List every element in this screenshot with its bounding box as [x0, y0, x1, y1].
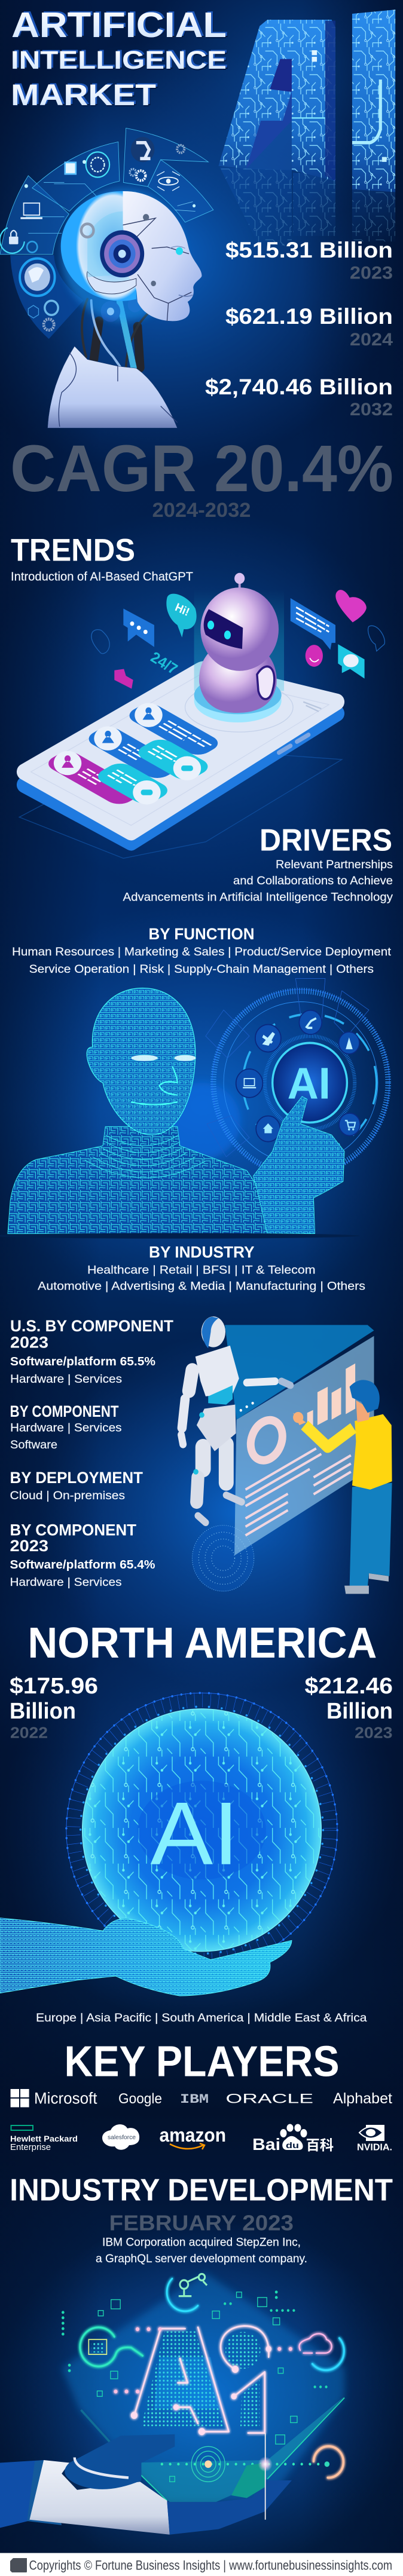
north america value 2022: 2022 — [10, 1723, 48, 1741]
target rings — [191, 2446, 329, 2482]
development date: FEBRUARY 2023 — [109, 2210, 294, 2235]
logo: Microsoft — [11, 2089, 97, 2108]
market value 2024 — [225, 304, 393, 350]
key players heading: KEY PLAYERS — [65, 2038, 340, 2086]
shoulder seams — [59, 353, 178, 427]
drivers heading: DRIVERS — [259, 823, 392, 858]
neck cables — [82, 297, 152, 367]
light cone — [62, 2273, 344, 2502]
illustration: wireframe human touching AI dial — [0, 978, 389, 1239]
dashboard screen — [225, 1325, 374, 1555]
drivers text — [123, 858, 393, 903]
title: ARTIFICIAL — [11, 5, 227, 45]
central glow — [163, 1083, 240, 1160]
person figure — [293, 1380, 392, 1594]
by component block: BY COMPONENT — [10, 1402, 118, 1420]
U.S. by component block: Hardware | Services — [10, 1373, 122, 1386]
north america value 2022: $175.96 — [10, 1674, 98, 1699]
other regions list: Europe | Asia Pacific | South America | Middle East & Africa — [36, 2011, 367, 2024]
logo: Oracle: ORACLE — [226, 2091, 313, 2106]
AI dial label: AI — [288, 1059, 331, 1108]
figure ground shadow — [0, 1233, 360, 1239]
north america value 2023: 2023 — [355, 1723, 392, 1741]
by component 2023 block: 2023 — [10, 1537, 48, 1555]
logo: Hewlett Packard Enterprise — [10, 2125, 78, 2152]
title: MARKET — [11, 78, 156, 112]
north america value 2023: Billion — [326, 1699, 393, 1724]
drivers text: Relevant Partnerships — [276, 858, 393, 871]
drivers text: Advancements in Artificial Intelligence Technology — [123, 890, 393, 903]
by industry list: Automotive | Advertising & Media | Manufacturing | Others — [38, 1280, 365, 1293]
U.S. by component block: 2023 — [10, 1334, 48, 1352]
letter A — [218, 20, 335, 181]
illustration: robot head with holographic fan panels — [0, 128, 213, 428]
drivers text: and Collaborations to Achieve — [233, 874, 393, 887]
development text — [96, 2236, 307, 2265]
robot figure — [181, 1316, 291, 1523]
trends heading: TRENDS — [11, 533, 135, 568]
footer logo — [10, 2558, 27, 2572]
letter I — [352, 10, 395, 192]
U.S. by component block: U.S. BY COMPONENT — [10, 1317, 173, 1335]
logo: Salesforce: salesforce — [108, 2134, 136, 2141]
north america value 2022: Billion — [10, 1699, 76, 1724]
by component block: Software — [10, 1438, 57, 1451]
wireframe hand — [253, 1096, 344, 1234]
logo: Salesforce — [102, 2124, 139, 2150]
by industry heading: BY INDUSTRY — [149, 1243, 255, 1261]
by industry list: Healthcare | Retail | BFSI | IT & Telecom — [87, 1263, 316, 1276]
fan panels — [0, 128, 213, 339]
logo: Baidu — [252, 2124, 334, 2154]
by component 2023 block — [10, 1521, 155, 1589]
market value 2023 — [225, 238, 393, 283]
logo: Baidu: 百科 — [306, 2137, 334, 2153]
industry development heading: INDUSTRY DEVELOPMENT — [10, 2173, 393, 2207]
phone body — [25, 669, 337, 843]
development text: IBM Corporation acquired StepZen Inc, — [102, 2236, 301, 2249]
logo: Nvidia — [357, 2125, 392, 2153]
north america value 2023 — [305, 1674, 393, 1741]
illustration: robot and person with dashboard — [181, 1316, 392, 1594]
panel icons — [0, 137, 196, 330]
by function list — [12, 945, 392, 976]
floating chat icons: Hi! — [173, 601, 191, 618]
dotted globe — [192, 1525, 255, 1592]
by component 2023 block: Hardware | Services — [10, 1576, 122, 1589]
north america value 2023: $212.46 — [305, 1674, 393, 1699]
logo: Microsoft: Microsoft — [34, 2090, 97, 2108]
logo: Google: Google — [118, 2091, 162, 2107]
market value 2032: 2032 — [350, 400, 393, 419]
by deployment block: Cloud | On-premises — [10, 1489, 125, 1502]
illustration: phone with chatbot — [19, 573, 384, 858]
by component block — [10, 1402, 122, 1451]
chatbot robot — [185, 573, 293, 732]
logo: Baidu: du — [286, 2140, 299, 2150]
by industry list — [38, 1263, 365, 1293]
logo: Amazon: amazon — [159, 2124, 226, 2146]
neon icon rings — [80, 2278, 344, 2478]
robot shoulders — [48, 347, 178, 428]
logo: Hewlett Packard Enterprise: Hewlett Packard — [10, 2134, 78, 2143]
logo: Baidu: Bai — [252, 2135, 280, 2154]
logo: Hewlett Packard Enterprise: Enterprise — [10, 2143, 51, 2152]
CAGR period: 2024-2032 — [152, 499, 251, 522]
market value 2024: 2024 — [350, 330, 393, 350]
sphere AI label: AI — [150, 1783, 239, 1883]
market value 2032: $2,740.46 Billion — [205, 375, 393, 399]
development text: a GraphQL server development company. — [96, 2252, 307, 2265]
logo: Nvidia: NVIDIA. — [357, 2143, 392, 2153]
title — [11, 5, 227, 112]
by component 2023 block: BY COMPONENT — [10, 1521, 136, 1539]
by component 2023 block: Software/platform 65.4% — [10, 1558, 155, 1572]
by function heading: BY FUNCTION — [148, 925, 255, 943]
wireframe head — [87, 988, 196, 1135]
chat bubbles — [42, 700, 224, 807]
market value 2023: $515.31 Billion — [225, 238, 393, 262]
logo: Alphabet: Alphabet — [333, 2090, 392, 2107]
network ring — [66, 1693, 337, 1967]
tech dots and squares — [63, 2292, 332, 2482]
by function list: Human Resources | Marketing & Sales | Product/Service Deployment — [12, 945, 392, 958]
U.S. by component block — [10, 1317, 173, 1386]
north america heading: NORTH AMERICA — [28, 1619, 377, 1667]
circuit sphere — [83, 1709, 321, 1952]
market value 2023: 2023 — [350, 263, 393, 283]
AI dial — [206, 978, 389, 1176]
title: INTELLIGENCE — [11, 46, 227, 75]
market value 2032 — [205, 375, 393, 419]
north america value 2022 — [10, 1674, 98, 1741]
robot hand — [0, 2433, 292, 2535]
phone ghost reflection — [19, 746, 342, 858]
floating chat icons — [91, 590, 384, 689]
by deployment block: BY DEPLOYMENT — [10, 1469, 143, 1487]
robot arm icon — [179, 2274, 207, 2296]
market value 2024: $621.19 Billion — [225, 304, 393, 329]
by function list: Service Operation | Risk | Supply-Chain Management | Others — [29, 963, 374, 976]
wireframe hand — [0, 1918, 292, 1996]
illustration: circuit board AI letters — [218, 10, 395, 247]
wireframe body — [8, 1126, 313, 1234]
by component block: Hardware | Services — [10, 1422, 122, 1435]
neon AI strokes — [115, 2326, 291, 2434]
CAGR headline: CAGR 20.4% — [10, 432, 393, 506]
U.S. by component block: Software/platform 65.5% — [10, 1355, 155, 1368]
footer bar — [0, 2553, 403, 2576]
illustration: AI sphere held in hand — [0, 1693, 337, 1996]
chip icon — [88, 2339, 106, 2354]
trends text: Introduction of AI-Based ChatGPT — [11, 571, 193, 584]
dial icons — [236, 1010, 360, 1142]
by deployment block — [10, 1469, 143, 1502]
reflection of AI letters — [220, 167, 395, 247]
logo: IBM: IBM — [180, 2092, 209, 2107]
dot matrix letters — [141, 2332, 260, 2426]
robot head — [61, 189, 202, 321]
illustration: robot hand with neon AI — [0, 2273, 344, 2535]
floating chat icons: 24/7 — [148, 648, 180, 678]
